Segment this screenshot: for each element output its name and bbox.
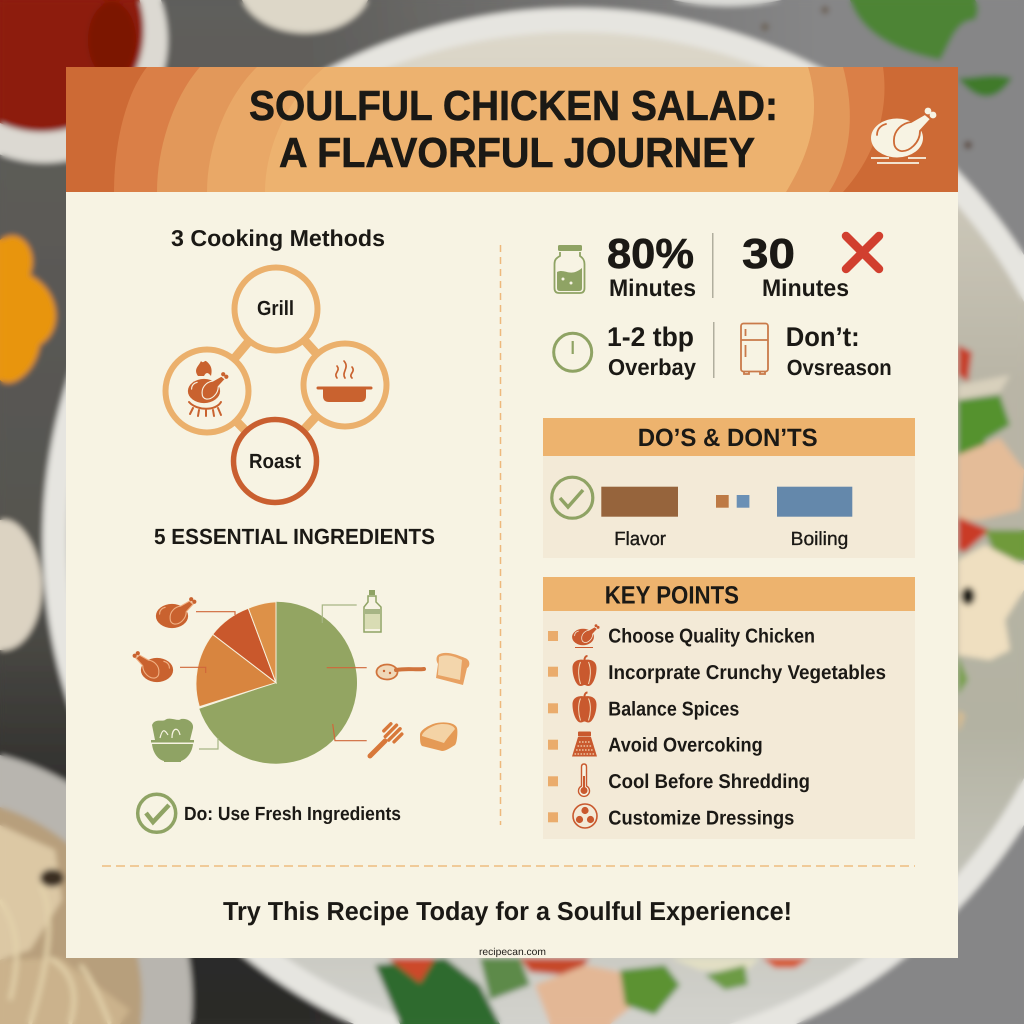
stat: 30 minutes: 30	[742, 230, 795, 277]
key point: chicken: Choose Quality Chicken	[608, 626, 815, 648]
heading band	[543, 577, 915, 611]
key point: vegetables	[572, 656, 886, 686]
icon: clock	[554, 333, 592, 371]
heading band: KEY POINTS	[605, 581, 739, 609]
legend swatches	[716, 495, 749, 508]
stat: 1-2 tbp overbay	[554, 322, 696, 380]
label: flavor: Flavor	[614, 529, 667, 550]
stat: 1-2 tbp overbay: 1-2 tbp	[607, 322, 694, 352]
heading band	[543, 418, 915, 456]
label: boiling: Boiling	[791, 529, 848, 550]
pie chart	[196, 602, 357, 764]
stat: 80% minutes: 80%	[607, 230, 694, 277]
panel: key points	[543, 577, 915, 839]
icon: bread loaf	[420, 722, 457, 751]
key point: grater	[572, 732, 763, 757]
icon: roast chicken in header	[871, 108, 936, 163]
bullets	[548, 631, 558, 822]
header banner	[66, 67, 958, 192]
key point: spices: Balance Spices	[608, 699, 739, 721]
key point: dressing: Customize Dressings	[608, 807, 794, 829]
title: A FLAVORFUL JOURNEY	[279, 129, 755, 176]
stat: 80% minutes: Minutes	[609, 275, 696, 302]
bar: flavor	[601, 487, 678, 517]
key point: grater: Avoid Overcoking	[608, 735, 763, 757]
pie leader lines	[180, 605, 367, 749]
key point: vegetables: Incorprate Crunchy Vegetables	[608, 662, 886, 684]
circle: grill: Grill	[257, 297, 294, 320]
icon: salad bowl	[151, 719, 194, 762]
key point: dressing	[573, 804, 794, 829]
source credit: recipecan.com	[479, 947, 546, 958]
do: fresh ingredients: Do: Use Fresh Ingredients	[184, 804, 401, 825]
circle: roast: Roast	[249, 450, 301, 473]
stat: 30 minutes: Minutes	[762, 275, 849, 302]
footer call to action: Try This Recipe Today for a Soulful Experience!	[223, 896, 792, 926]
stat: don't ovsreason: Ovsreason	[787, 355, 892, 380]
circle: chicken over fire	[166, 350, 248, 432]
icon: jar	[554, 245, 584, 293]
circle: steaming pot	[304, 344, 386, 426]
title	[249, 82, 778, 176]
icon: spoon	[376, 664, 424, 680]
panel: do's and don'ts	[543, 418, 915, 558]
do: fresh ingredients	[138, 794, 401, 832]
circle: roast	[234, 420, 316, 502]
icon: chicken leg left	[133, 651, 173, 682]
icon: check	[552, 477, 593, 518]
icon: honey dipper	[370, 722, 404, 756]
title: SOULFUL CHICKEN SALAD:	[249, 82, 778, 129]
heading band: DO’S & DON’TS	[638, 424, 818, 452]
icon: red cross	[846, 236, 879, 269]
stat: 1-2 tbp overbay: Overbay	[608, 354, 696, 380]
main panel	[66, 67, 958, 958]
icon: fridge	[741, 324, 768, 374]
circle: grill	[234, 268, 318, 350]
stat: don't ovsreason: Don’t:	[786, 322, 860, 352]
key point: thermometer	[579, 764, 810, 796]
key point: spices	[572, 692, 739, 722]
icon: toast slice	[436, 653, 469, 685]
icon: chicken leg top	[156, 597, 196, 628]
key point: thermometer: Cool Before Shredding	[608, 771, 810, 793]
stat: don't ovsreason	[741, 322, 892, 380]
cooking methods diagram	[166, 268, 386, 502]
stat: 30 minutes	[742, 230, 879, 302]
heading: ingredients: 5 ESSENTIAL INGREDIENTS	[154, 524, 435, 549]
icon: oil bottle	[364, 590, 381, 632]
heading: cooking methods: 3 Cooking Methods	[171, 225, 385, 251]
bar: boiling	[777, 487, 852, 517]
stat: 80% minutes	[554, 230, 696, 302]
